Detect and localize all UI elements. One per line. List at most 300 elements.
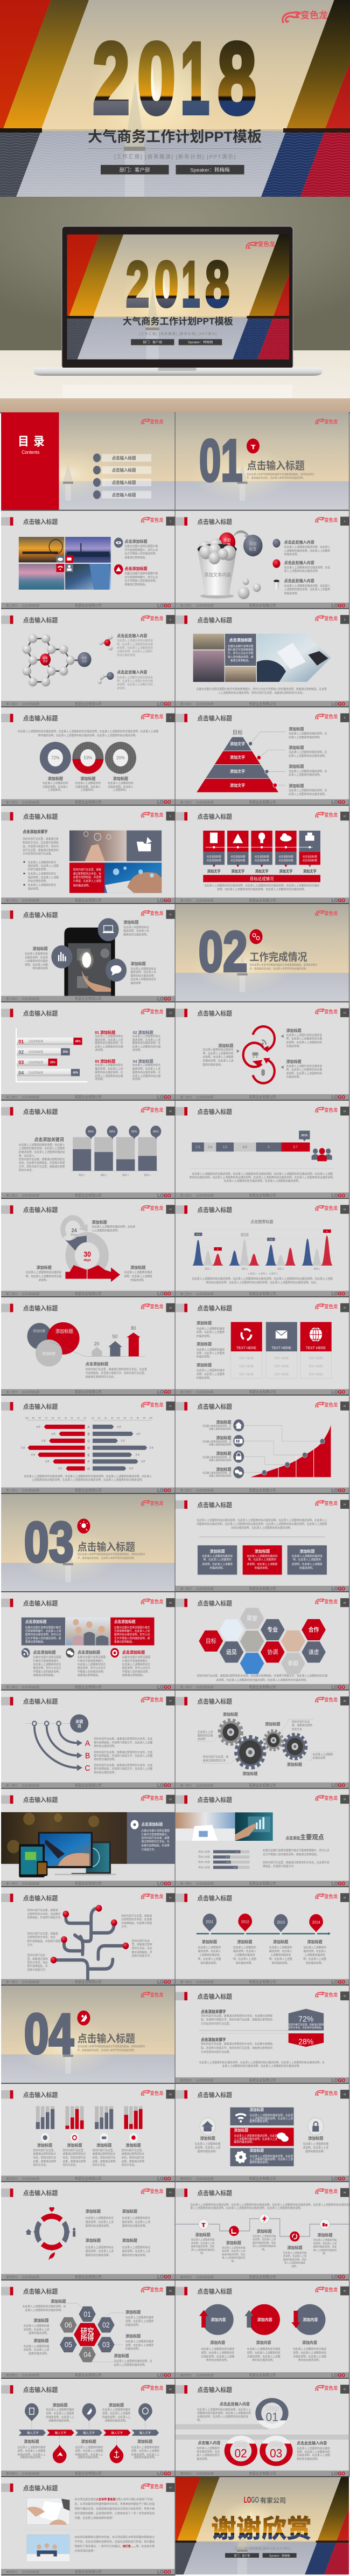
- option A: A: [85, 1739, 90, 1748]
- node 2: [222, 2226, 246, 2263]
- note 06: 添加标题: [33, 2318, 49, 2323]
- item 3: 右键点击图片选择设置图: [122, 1655, 150, 1659]
- node 2: 在此录入上述图表的描: [222, 2246, 246, 2249]
- circle 3: 在此录入上述图表的综合描述: [293, 2347, 326, 2351]
- note 2014: 添加标题: [307, 1939, 323, 1944]
- footer: 有家企业有限公司: [75, 1291, 102, 1296]
- text block: 您的内容打在这里，或者通过复制您的文: [19, 1157, 65, 1162]
- chevron row: 输入文字: [27, 2430, 39, 2435]
- card 3: TEXT HERE: [306, 1346, 326, 1350]
- legend 1: [272, 539, 330, 556]
- footer: 点击添加标题: [196, 2373, 214, 2378]
- divider lines: [199, 2030, 289, 2033]
- page number: 18: [344, 1208, 346, 1211]
- top note 2: 添加标题: [109, 2402, 124, 2407]
- mini bar chart: 4.3: [226, 1856, 228, 1859]
- footer: LO: [331, 1684, 338, 1690]
- legend 1: 上述图表的描述说明，在此录入上述图表: [284, 549, 330, 553]
- footer: GO: [164, 897, 171, 903]
- section icon: [77, 1518, 90, 1534]
- note top: 添加标题: [123, 920, 139, 925]
- note right bottom: 明，在此录入上述图表的综合描: [286, 1068, 322, 1072]
- pin 2012: 2012: [241, 1920, 249, 1924]
- text 1: 在此录入上述图表的综合: [86, 2216, 114, 2220]
- segmented bar: [192, 1142, 310, 1151]
- right feature: 述说明，在此录入上述: [303, 2146, 328, 2150]
- gear 3: [264, 1731, 282, 1750]
- category letters: E: [88, 1453, 90, 1458]
- speaker tag: Speaker：韩梅梅: [190, 167, 230, 174]
- footer: 点击添加标题: [22, 2373, 39, 2378]
- mini bar chart: 6.7: [234, 1866, 236, 1869]
- bullet list: 在此录入上述图表的综合: [28, 883, 56, 887]
- item 3: 在此录入上述图表的综合: [122, 1662, 150, 1667]
- box 1: 的描述说明。: [209, 1566, 225, 1570]
- note 05: 在此录入上述图表的描: [24, 2344, 49, 2348]
- step 01: [255, 2398, 289, 2428]
- keyword text: 文本后您的内容打在这里。: [23, 852, 53, 856]
- contents list: [93, 453, 151, 499]
- top note 2: 在此录入上述图表的描述: [102, 2408, 130, 2412]
- banner gear: 入上述图表的描述说明，在此录入上述: [250, 2157, 293, 2161]
- text block: 您的内容打在这里，或者通过复制您的文本后，在此框: [86, 1368, 147, 1371]
- mini bar chart: 添加小标题: [198, 1866, 210, 1869]
- brand logo: 变色龙: [324, 2287, 338, 2292]
- screen logo: [247, 241, 275, 249]
- note left: 添加标题: [33, 946, 48, 951]
- note 3: 框中选择粘贴，并: [27, 1964, 48, 1968]
- bar labels: 文字: [36, 1425, 40, 1429]
- text 4: 描述说明，在此录入上述: [122, 2249, 150, 2253]
- item 2: 或者通过复制粘贴。: [78, 1673, 101, 1677]
- note 2: 您的内容打在这里，或者通: [27, 1932, 58, 1936]
- brand logo: [283, 10, 328, 23]
- note 03: 说明，在此录入上述图表: [125, 2343, 153, 2347]
- footer: GO: [338, 1684, 345, 1690]
- footer: 第四部分: [6, 2177, 18, 2181]
- card 5: [299, 831, 320, 874]
- node 1: [191, 2219, 215, 2255]
- text 4: 添加标题: [122, 2238, 138, 2243]
- bar labels: 文字: [58, 1467, 62, 1470]
- footer: 有家企业有限公司: [75, 2569, 102, 2574]
- footer: 有家企业有限公司: [249, 2176, 276, 2181]
- note 2: 描述说明。: [197, 2457, 209, 2461]
- donut 72: 在此录入上述图表的综: [43, 781, 68, 785]
- footer: 第四部分: [6, 2275, 18, 2279]
- big year 2018: [93, 22, 256, 135]
- box 3: 添加标题: [299, 1549, 315, 1553]
- axis: 10: [83, 1417, 86, 1419]
- note 1: 选择粘贴，并选择只保留文字。: [27, 1916, 63, 1919]
- card 2: TEXT HERE: [271, 1346, 292, 1350]
- subtitle: [工作汇报] [商务路演] [新年计划] [PPT演示]: [234, 2546, 291, 2551]
- slide 26: hexagon honeycomb: [176, 1592, 349, 1690]
- title: 点击输入标题: [197, 1993, 232, 2000]
- step 2: [202, 1435, 244, 1447]
- card 1: 点击添加标题: [207, 859, 221, 862]
- laptop mockup section: [0, 197, 350, 412]
- section description: 请点击录入本章节的概括性描述文字或者复制粘贴，请添加说明文: [247, 472, 314, 476]
- text 2: 在此录入上述图表的综合: [122, 2216, 150, 2220]
- footer: 点击添加标题: [22, 800, 39, 804]
- note 4: 此录入上述图表的综合描述说明。: [289, 792, 327, 796]
- note right bottom: 在此录入上述图片的综合描述说: [286, 1064, 322, 1068]
- slide 11: smartphone: [1, 904, 176, 1003]
- note 3: 点击此处输入内容: [297, 2441, 327, 2446]
- note 03: [125, 2333, 153, 2351]
- node 3: 明。: [262, 2248, 267, 2252]
- footer: 第二部分: [6, 1292, 18, 1296]
- slide 42: steps: [176, 2379, 349, 2477]
- note 2011: 在此录入上述图表的: [198, 1945, 221, 1949]
- brand logo: 变色龙: [150, 615, 164, 621]
- footer: 有家企业有限公司: [249, 1094, 276, 1100]
- note 2: 点击输入内容: [198, 2440, 221, 2445]
- footer: GO: [164, 1291, 171, 1296]
- title: 点击输入标题: [197, 813, 232, 820]
- circle 1: [199, 2304, 234, 2362]
- footer: LO: [157, 701, 164, 707]
- card 2: [227, 831, 248, 874]
- chart title: 点击图表标题: [250, 1219, 274, 1224]
- footer: 第三部分: [6, 997, 18, 1001]
- footer: 有家企业有限公司: [75, 1193, 102, 1198]
- note 5: 框中选择粘贴，并: [132, 1950, 152, 1954]
- left notes: 说明，在此录入上述图表: [197, 1351, 225, 1355]
- footer: 第三部分: [6, 702, 18, 706]
- banner gear: 在此录入上述图表的描述说明，在此录: [250, 2154, 293, 2158]
- gear 2: [236, 1737, 264, 1767]
- title: 点击输入标题: [23, 714, 58, 722]
- slide 21: butterfly chart: [1, 1396, 176, 1494]
- legend 3: 在此录入上述图表的描述说明，在此录入: [284, 584, 330, 588]
- banner wifi: 在此录入上述图表的描述说明，在此录: [250, 2114, 293, 2117]
- group 1: 本后。您的内容打在: [33, 2156, 56, 2160]
- intro text: 的综合描述说明，在此录入上述图表的综合描述说明。: [231, 1526, 292, 1530]
- note left: 说明，在此录入本图: [25, 963, 48, 966]
- axis labels: 类别 1: [205, 1267, 212, 1271]
- axis: 30: [104, 1417, 107, 1419]
- card 4: 点击添加标题: [278, 855, 293, 859]
- brand logo: 变色龙: [150, 1303, 164, 1309]
- slate atom: [78, 652, 92, 667]
- footer: 点击添加标题: [22, 1292, 39, 1296]
- description: 择粘贴，并选择只保留文字。: [263, 1864, 296, 1868]
- text box: 点击添加标题: [229, 638, 253, 643]
- page number: 16: [344, 1110, 346, 1113]
- value bubbles: [86, 1125, 161, 1139]
- footer: 点击添加标题: [22, 702, 39, 706]
- top note 1: 的描述说明，在此录入上: [46, 2415, 74, 2419]
- brand logo: 变色龙: [324, 1009, 338, 1014]
- group 4: 添加标题: [125, 2143, 141, 2148]
- slate text panel: 片格式可直接替换图片。: [141, 1833, 170, 1836]
- box 3: 在此录入上述图表的描述说: [292, 1554, 323, 1558]
- text 01: 此录入上述图表的综合描: [95, 1045, 123, 1048]
- page number: 21: [169, 1405, 172, 1407]
- step 2: 添加标题: [216, 1435, 232, 1440]
- leader lines: [250, 732, 285, 785]
- footer: 有家企业有限公司: [249, 2274, 276, 2279]
- footer: GO: [164, 701, 171, 707]
- footer: LO: [157, 1488, 164, 1493]
- footer: LO: [157, 1389, 164, 1395]
- footer: 点击添加标题: [196, 1488, 214, 1493]
- text box: 图片格式可直接替换图: [228, 648, 254, 652]
- description: 在此录入上述图表的综合描述说明，在此录入上述图表的描述说明。: [224, 1179, 300, 1183]
- intro: 录入上述图表的综合描述说明，在此录入上述图表的综合描述说明，在此录入上述图表的描述说明。: [190, 2206, 303, 2210]
- segmented bar: 5: [268, 1146, 270, 1149]
- card 2: 点击添加标题: [230, 855, 246, 859]
- brand logo: 变色龙: [324, 517, 338, 523]
- laptop screen: [67, 234, 289, 360]
- donut 72: 合描述说明，在此录入: [43, 785, 68, 789]
- drop icons: [53, 2444, 123, 2463]
- hex labels: 荣誉: [247, 1615, 258, 1622]
- text box: [225, 634, 256, 666]
- section description: 字，图表描述及总结。在此录入本章节的综合描述说明。: [78, 2048, 136, 2052]
- item 1: 的综合描述说明。: [117, 653, 137, 657]
- footer: LO: [331, 2176, 338, 2181]
- title: 点击输入标题: [23, 1697, 58, 1705]
- donut 53: 53%: [83, 755, 92, 761]
- footer: 有家企业有限公司: [249, 1783, 276, 1787]
- bottom note 1: 添加标题: [24, 2439, 39, 2444]
- note bottom left: 者通过复制您的文本: [202, 1759, 226, 1763]
- banner chat: 添加标题: [234, 2128, 248, 2133]
- axis: 100: [149, 1417, 153, 1419]
- footer: 有家企业有限公司: [75, 1488, 102, 1493]
- note right: 图表的综合描述说明，: [131, 974, 156, 978]
- bar 03: 25%: [50, 1061, 55, 1064]
- bar 01: 45%: [75, 1040, 81, 1044]
- footer: LO: [157, 2274, 164, 2280]
- 28 percent badge: [289, 2033, 324, 2047]
- slide 39: hexagon research: [1, 2281, 176, 2379]
- brand logo: 变色龙: [324, 418, 338, 425]
- note 2: 过复制您的文本后，在此: [27, 1935, 55, 1939]
- text 02: 此录入上述图表的综合描: [132, 1045, 160, 1048]
- slate text panel: 通过复制您的文本后，在: [141, 1840, 170, 1843]
- description: 在此录入上述图表的综合描述说明，在此录入上述图表的综合描述说明，在此录入上述图表的综合描述说明，在此录入上述图: [192, 1277, 333, 1281]
- slide 25: team photo panels: [1, 1592, 176, 1690]
- slate panel: 点击添加标题: [25, 1619, 47, 1624]
- card 1: [203, 831, 225, 874]
- venn circles: [27, 1322, 80, 1366]
- center hexagon: 研究: [81, 2327, 94, 2335]
- footer: 第一部分: [180, 1783, 192, 1787]
- page number: 31: [169, 1896, 172, 1899]
- ring hole: [75, 1242, 99, 1269]
- value bubbles: 45%: [153, 1130, 159, 1134]
- brand logo: 变色龙: [324, 1893, 338, 1900]
- footer: LO: [331, 897, 338, 903]
- footer: 点击添加标题: [22, 1193, 39, 1198]
- slide 30: main viewpoint: [176, 1789, 349, 1887]
- bar 03: 点击添加标题: [29, 1060, 43, 1064]
- item 2: 右键点击图片选择设置图: [78, 1655, 106, 1659]
- note 3: 添加标题: [289, 764, 304, 769]
- text 2: 本此项目能够得以顺利的完成，也与项目团队中所有同事的帮助是分: [74, 2534, 155, 2539]
- page number: 8: [344, 716, 346, 719]
- red panel: 可直接替换图片，在此录入上述: [114, 1629, 150, 1633]
- footer: 第一部分: [180, 1881, 192, 1886]
- note 02: 在此录入上述图表的描述: [125, 2316, 153, 2319]
- page number: 27: [169, 1700, 172, 1702]
- brand logo: 变色龙: [324, 1795, 338, 1801]
- text 2: 不开的。无论在初期的创新阶段，还是在后期的执行阶段，他们都给: [74, 2539, 155, 2544]
- footer: GO: [164, 603, 171, 608]
- screen year: 0: [154, 248, 178, 320]
- option B: 您的内容打在这里，或者通过复制您的文本后，在此: [94, 1750, 152, 1754]
- group 1: 您的内容打在这里，: [33, 2149, 56, 2152]
- text 01: 01 添加标题: [95, 1030, 116, 1035]
- note 02: 说明，在此录入上述图表: [125, 2319, 153, 2323]
- card 2: 点击添加标题: [230, 859, 246, 862]
- footer: 第四部分: [180, 2078, 192, 2083]
- node 1: 添加标题: [195, 2232, 211, 2237]
- step 2: 击输入图表的描述说明: [209, 1442, 232, 1446]
- ring diagram: [25, 2207, 75, 2260]
- note 3: 表的综合描述说明。: [297, 2457, 320, 2461]
- axis: 80: [137, 1417, 139, 1419]
- card 3: TEXT HERE: [309, 1357, 324, 1360]
- note 1: 此录入上述图表的描述说明。: [289, 735, 322, 739]
- keyword bubble: [70, 1714, 88, 1732]
- page number: 29: [169, 1798, 172, 1801]
- page number: 40: [344, 2289, 346, 2292]
- venn circles: 添加标题: [55, 1328, 73, 1334]
- left feature: 添加标题: [200, 2136, 215, 2140]
- note left: 在此录入上述图表的综合描述说: [26, 1270, 61, 1274]
- note 5: 里，或者通过复制: [132, 1943, 152, 1946]
- footer: LO: [157, 1291, 164, 1296]
- circle 3: [291, 2304, 326, 2362]
- footer: LO: [157, 1881, 164, 1887]
- note 3: 选择只保留文字。: [27, 1968, 48, 1972]
- bottom note 3: 在此录入上述图表的描述: [131, 2446, 159, 2449]
- donut 20: 20%: [116, 755, 125, 761]
- brand logo: 变色龙: [324, 1992, 338, 1998]
- footer: GO: [338, 1881, 345, 1887]
- hex labels: 谦虚: [309, 1648, 319, 1656]
- desk: [0, 350, 350, 398]
- footer: GO: [338, 603, 345, 608]
- step 4: 点击输入图表的描述说明，点: [202, 1471, 232, 1475]
- circle 3: 合描述说明，在此录入上述图: [293, 2354, 326, 2359]
- footer: 有家企业有限公司: [75, 1979, 102, 1984]
- footer: 点击添加标题: [22, 1095, 39, 1100]
- big year 2018: 0: [137, 22, 176, 135]
- group 3: [93, 2106, 115, 2167]
- item 2: 述说明。: [117, 686, 127, 690]
- footer: 点击添加标题: [196, 2471, 214, 2476]
- brand logo: 变色龙: [150, 2090, 164, 2096]
- note 02: 添加标题: [125, 2310, 141, 2315]
- card 5: 点击添加标题: [303, 855, 317, 859]
- title: 点击输入标题: [23, 1108, 58, 1115]
- slate panel: 可直接替换图片，在此录入上述: [25, 1629, 61, 1633]
- description: 说明，在此录入上述图表的综合描述说明，在此录入上述图表的综合描述说明。: [217, 887, 306, 891]
- note 2: 框中选择粘贴，并选择只保留: [27, 1939, 60, 1943]
- big year 2018: 8: [218, 22, 256, 135]
- footer: GO: [338, 1488, 345, 1493]
- section number: 01: [199, 428, 242, 494]
- item 3: 片格式可直接替换图片，: [122, 1659, 150, 1663]
- text 3: 图表的综合描述说明。: [86, 2254, 111, 2257]
- axis: 20: [77, 1417, 80, 1419]
- note top: 在此录入上述图表的描述说明，在此录: [92, 1225, 135, 1228]
- note 2013: [269, 1939, 292, 1965]
- top note 1: 添加标题: [52, 2402, 68, 2407]
- footer: 第一部分: [180, 1586, 192, 1591]
- photo: meeting: [176, 1812, 235, 1841]
- box 2: 明，在此录入上述图表的: [248, 1558, 276, 1562]
- red balls: [51, 1905, 129, 1964]
- note 2014: 表的描述说明。: [306, 1961, 324, 1965]
- node 5: 明。: [323, 2252, 327, 2255]
- footer: 有家企业有限公司: [249, 2372, 276, 2378]
- note 01: [23, 2299, 66, 2312]
- footer: 有家企业有限公司: [75, 2471, 102, 2476]
- hexagon cluster: 06: [65, 2321, 72, 2329]
- bar labels: 文字: [117, 1425, 121, 1429]
- screen year: 1: [181, 248, 200, 320]
- laptop bubble: [98, 918, 119, 941]
- footer: GO: [338, 2176, 345, 2181]
- note 05: 添加标题: [33, 2338, 49, 2343]
- card 3: 添加文字: [255, 868, 269, 874]
- node 1: 明。: [200, 2252, 205, 2255]
- note 01: 在此录入上述图表的综合描述说明，在: [23, 2304, 66, 2309]
- label ball: [243, 535, 263, 556]
- footer: 点击添加标题: [22, 1685, 39, 1689]
- hex labels: 合作: [309, 1626, 319, 1633]
- title: 点击输入标题: [23, 616, 58, 624]
- keyword text: 贴，并选择只保留文字。您的内: [23, 845, 59, 848]
- bar labels: 文字: [141, 1460, 145, 1463]
- brand logo: 变色龙: [150, 2287, 164, 2292]
- footer: GO: [164, 1193, 171, 1198]
- note top: [123, 920, 149, 937]
- 24 hours ring: 24: [72, 1228, 77, 1234]
- footer: 第二部分: [180, 1488, 192, 1493]
- note 2: 添加标题: [289, 745, 304, 750]
- chart frame: [16, 1028, 88, 1082]
- laptop reflection: [62, 385, 292, 398]
- cycle diagram: [243, 1026, 275, 1083]
- step 01: Step: [265, 2404, 279, 2412]
- axis labels: 类别 2: [101, 1173, 107, 1177]
- node 5: 图表的描述说明，在此: [313, 2244, 337, 2249]
- laptop base: [34, 368, 322, 376]
- brand logo: 变色龙: [150, 2188, 164, 2194]
- bar labels: 文字: [31, 1453, 35, 1457]
- group 4: 或者通过复制您的文: [122, 2152, 144, 2156]
- top note 2: 的描述说明，在此录入上: [102, 2415, 130, 2419]
- category letters: B: [88, 1432, 90, 1437]
- option A: 您的内容打在这里，或者通过复制您的文本后，在此: [94, 1737, 152, 1741]
- note 2: [289, 745, 327, 758]
- banner wifi: [230, 2107, 294, 2125]
- group 2: 或者通过复制您的文: [63, 2152, 86, 2156]
- circle 2: [244, 2304, 281, 2362]
- bottom note 2: 的描述说明，在此录入上: [75, 2453, 103, 2456]
- top note 1: [46, 2402, 74, 2423]
- note 1: 在此录入上述图表的描述说明，在: [289, 731, 327, 736]
- group 4: 您的内容打在这里，: [122, 2149, 144, 2152]
